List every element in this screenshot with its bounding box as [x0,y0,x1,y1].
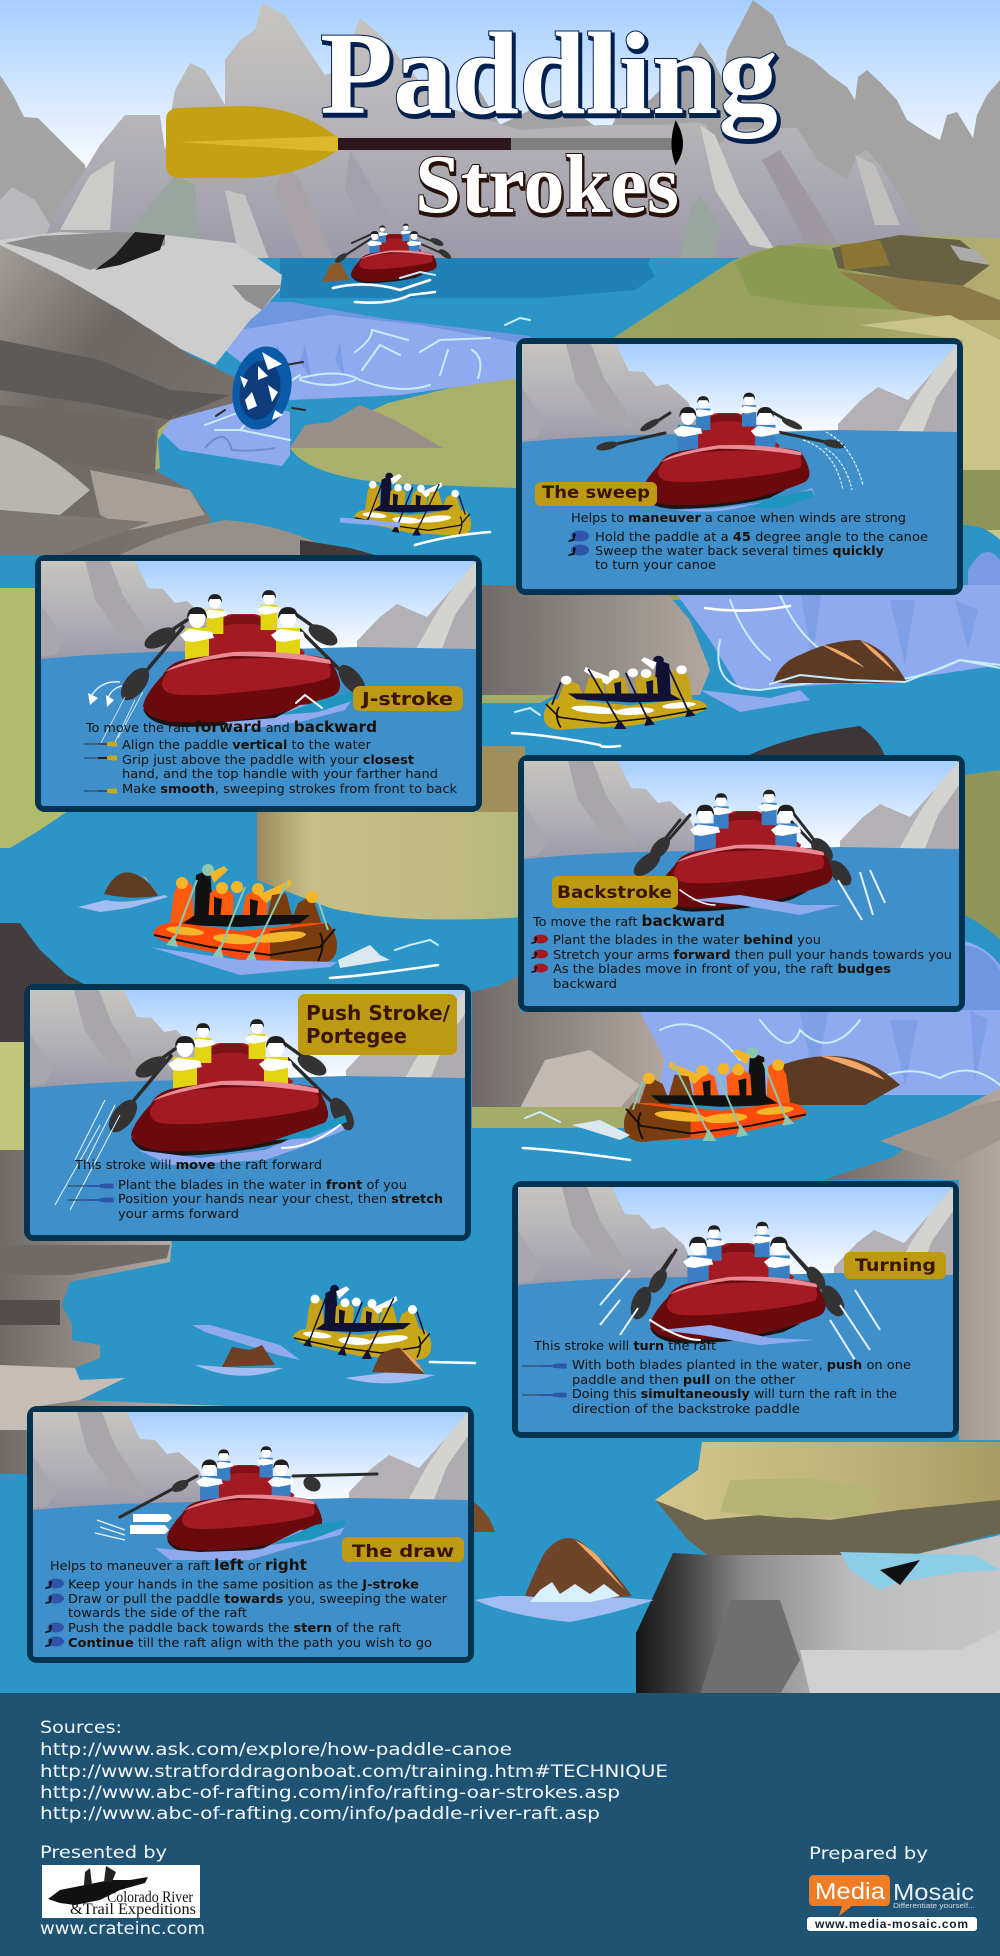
text: the sweep [568,510,928,572]
text: the sweep: Helps to maneuver a canoe when winds are strong [571,510,906,525]
oars and raft [600,1222,880,1360]
text: backstroke [531,912,952,991]
presented by: Presented by [40,1843,167,1863]
background: sky [0,0,1000,200]
icon: paddle [166,106,682,178]
panel: the draw [27,1406,474,1663]
background: grey boulder bottom right [636,1535,1000,1694]
label: turning [844,1252,946,1279]
title: Paddling: Paddling [320,8,778,139]
oars and raft [55,1019,359,1210]
background: central plateau [257,811,525,920]
presented by: Colorado River [107,1889,194,1906]
rock near orange raft [78,872,168,912]
oars and raft [88,590,370,745]
raft: overhead blue raft [215,341,355,440]
text: turning [522,1338,911,1416]
background: upper waterfall [157,302,540,466]
footer [0,1693,1000,1956]
background: tan cliff bottom right [655,1442,1000,1555]
prepared by: Media [815,1878,885,1904]
prepared by: Prepared by [809,1844,928,1864]
oars and raft [595,393,863,512]
label: j-stroke [353,686,463,711]
text: the draw: Continue till the raft align with the path you wish to go [68,1635,432,1650]
text: the draw: Helps to maneuver a raft left or right [50,1556,307,1574]
prepared by: Differentiate yourself... [893,1901,975,1910]
big rock behind orange raft [770,1056,900,1105]
text: turning: Doing this simultaneously will turn the raft in the [572,1386,897,1401]
text: the sweep: to turn your canoe [595,557,716,572]
sources: Sources: [40,1718,122,1738]
text: push stroke: This stroke will move the raft forward [74,1157,322,1172]
sources [40,1718,668,1824]
prepared by: Mosaic [893,1879,974,1905]
title: Paddling: Paddling [322,11,780,142]
label: push stroke [298,994,457,1055]
label: push stroke: Push Stroke/ [306,1001,451,1025]
background: big left rocks [0,232,375,555]
background: left rocks lower [0,1150,225,1474]
text: the draw: Draw or pull the paddle towards you, sweeping the water [68,1591,448,1606]
sources: http://www.ask.com/explore/how-paddle-canoe [40,1740,512,1760]
sources: http://www.stratforddragonboat.com/training.htm#TECHNIQUE [40,1762,668,1782]
presented by: &Trail Expeditions [70,1901,196,1918]
text: turning: With both blades planted in the water, push on one [572,1357,911,1372]
panel: j-stroke [35,555,482,812]
background: right grassy hill [610,235,1000,600]
raft: yellow raft B [512,656,707,747]
presented by: www.crateinc.com [40,1919,205,1939]
background: far grey mountains [0,0,1000,270]
background: river water [0,258,1000,1694]
background: right rock [823,1088,1000,1440]
text: j-stroke [84,718,458,796]
raft: orange raft B [523,1047,807,1160]
panel: the sweep [516,338,963,595]
background: lower left green bank [290,372,517,488]
raft: yellow raft C with rocks [192,1285,475,1383]
panel: push stroke [24,984,471,1241]
text: backstroke: Plant the blades in the water behind you [553,932,821,947]
label: the sweep: The sweep [542,483,650,503]
presented by [40,1843,205,1939]
small rock behind draw panel [470,1500,495,1532]
text: j-stroke: Make smooth, sweeping strokes from front to back [122,781,458,796]
background: dark boulder [745,726,885,757]
text: push stroke [68,1157,443,1221]
text: backstroke: To move the raft backward [532,912,725,930]
background: rock on the green bank [290,405,443,448]
text: the draw: towards the side of the raft [68,1605,247,1620]
raft: yellow raft A [340,473,490,545]
label: the draw [342,1537,464,1562]
panel: turning [512,1181,959,1438]
label: turning: Turning [855,1256,936,1276]
label: the sweep [535,482,657,506]
big rock behind yellow raft [770,640,1000,684]
oars and raft [95,1446,377,1560]
background: central brown rock block [478,585,710,812]
text: backstroke: Stretch your arms forward then pull your hands towards you [553,947,952,962]
raft: top red raft [322,224,452,303]
label: push stroke: Portegee [306,1024,407,1048]
text: j-stroke: To move the raft forward and backward [85,718,377,736]
text: backstroke: As the blades move in front of you, the raft budges [553,961,891,976]
label: backstroke: Backstroke [557,883,672,903]
text: the draw: Keep your hands in the same position as the J-stroke [68,1576,419,1592]
text: the sweep: Sweep the water back several times quickly [595,543,884,558]
background: mid-left dark rock [0,923,95,1045]
label: backstroke [552,876,678,908]
background: central rock under backstroke panel [472,975,665,1128]
text: j-stroke: Align the paddle vertical to the water [122,737,372,752]
sources: http://www.abc-of-rafting.com/info/rafting-oar-strokes.asp [40,1783,620,1803]
label: j-stroke: J-stroke [360,689,453,710]
prepared by [807,1844,977,1931]
title: Strokes: Strokes [415,138,679,231]
background: left green bank [0,588,68,848]
text: the sweep: Hold the paddle at a 45 degree angle to the canoe [595,529,928,544]
text: turning: direction of the backstroke paddle [572,1401,800,1416]
background: right olive bank [964,770,1000,940]
text: turning: This stroke will turn the raft [533,1338,716,1353]
background: right waterfalls [635,585,1000,1095]
text: push stroke: your arms forward [118,1206,239,1221]
text: push stroke: Plant the blades in the water in front of you [118,1177,407,1192]
text: backstroke: backward [553,976,617,991]
text: the draw: Push the paddle back towards the stern of the raft [68,1620,401,1635]
prepared by: www.media-mosaic.com [814,1917,968,1931]
raft: orange raft A [150,864,438,978]
brown rock in river [475,1538,654,1622]
text: the draw [45,1556,448,1650]
background: left green strip [0,1042,30,1150]
text: turning: paddle and then pull on the other [572,1372,796,1387]
oars and raft [630,790,885,920]
text: push stroke: Position your hands near your chest, then stretch [118,1191,443,1206]
background: central lilac mountains [0,3,940,262]
sources: http://www.abc-of-rafting.com/info/paddle-river-raft.asp [40,1804,600,1824]
title: Strokes: Strokes [416,141,680,234]
panel: backstroke [518,755,965,1012]
label: the draw: The draw [352,1542,454,1562]
text: j-stroke: Grip just above the paddle with your closest [122,752,414,767]
text: j-stroke: hand, and the top handle with your farther hand [122,766,438,781]
